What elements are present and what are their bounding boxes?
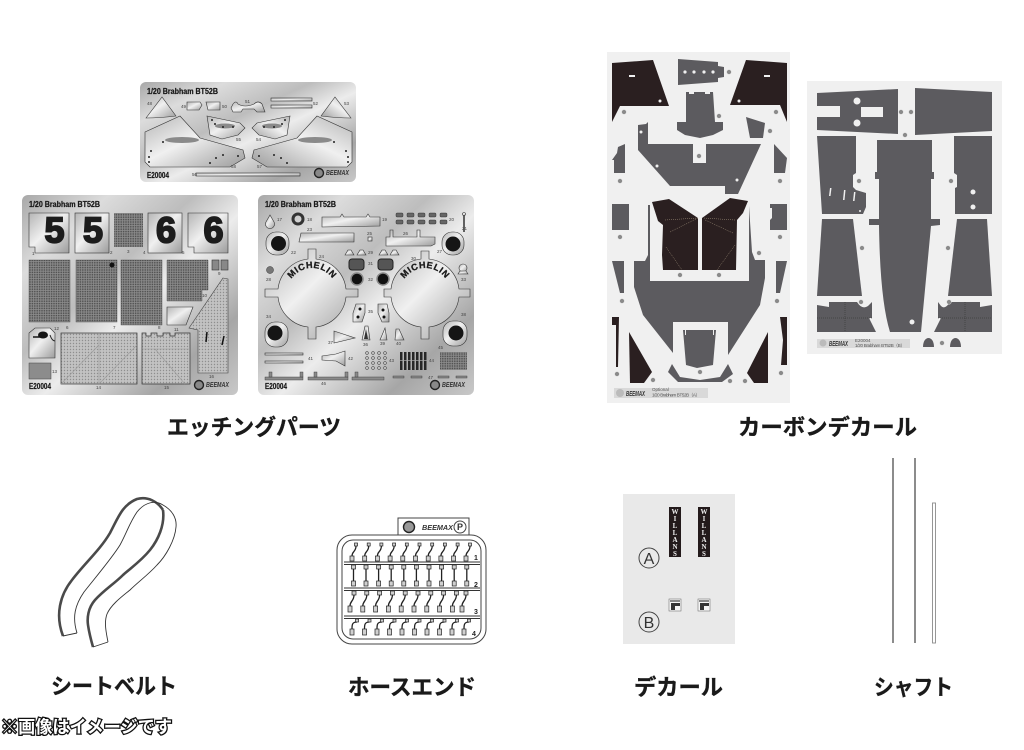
note: image is for illustration: ※画像はイメージです	[1, 717, 172, 737]
lower mesh plates	[29, 333, 190, 384]
panel: carbon decal sheet A	[607, 52, 790, 403]
part numbers: 15	[164, 385, 170, 390]
sheet label strip	[614, 387, 708, 398]
runner numbers: 2	[474, 582, 478, 589]
part numbers: 1	[32, 251, 35, 256]
dot grid 43	[366, 352, 386, 370]
part numbers: 50	[222, 104, 228, 109]
hose row 1	[350, 543, 472, 561]
part numbers: 28	[266, 277, 272, 282]
WILLANS decal right: A	[701, 536, 707, 544]
logo: BEEMAX	[314, 168, 350, 178]
part numbers: 25	[367, 231, 373, 236]
fret title: 1/20 Brabham BT52B	[265, 200, 336, 209]
small top parts	[266, 212, 466, 246]
part numbers: 8	[158, 325, 161, 330]
part numbers: 37	[328, 340, 334, 345]
marker B: B	[644, 615, 654, 632]
panel: carbon decal sheet B	[807, 81, 1002, 354]
part numbers: 56	[192, 172, 198, 177]
heading: shaft: シャフト	[874, 675, 953, 700]
sheet label strip: Optional	[652, 387, 669, 392]
side plate 16	[189, 278, 228, 373]
fret code: E20004	[265, 382, 287, 391]
mesh panels	[29, 213, 228, 325]
wheel discs corner	[265, 232, 467, 347]
part numbers: 36	[363, 342, 369, 347]
part numbers: 23	[307, 227, 313, 232]
sprue tag	[398, 518, 469, 535]
part numbers: 21	[462, 226, 468, 231]
fret title: 1/20 Brabham BT52B	[29, 200, 100, 209]
part numbers: 14	[96, 385, 102, 390]
WILLANS decal left: I	[674, 515, 677, 523]
part numbers: 29	[368, 250, 374, 255]
WILLANS decal right: S	[702, 550, 706, 558]
WILLANS decal left: L	[673, 522, 678, 530]
logo: BEEMAX	[194, 380, 230, 390]
logo: BEEMAX: BEEMAX	[442, 382, 466, 389]
logo: BEEMAX	[430, 380, 466, 390]
illustration: hose ends sprue	[337, 518, 486, 644]
part numbers: 57	[257, 164, 263, 169]
WILLANS decal left: L	[673, 529, 678, 537]
fret code: E20004	[147, 171, 169, 180]
part numbers: 22	[291, 250, 297, 255]
part numbers	[32, 249, 221, 390]
grey carbon decals	[612, 59, 787, 382]
part numbers: 6	[66, 325, 69, 330]
part numbers: 11	[174, 327, 179, 332]
part numbers: 7	[113, 325, 116, 330]
heading: seat belt: シートベルト	[51, 674, 177, 699]
marker A	[639, 548, 659, 568]
dot block 45	[440, 352, 467, 370]
number plates: 5	[44, 210, 65, 250]
part numbers: 18	[307, 217, 313, 222]
WILLANS decal left: W	[672, 508, 678, 516]
sheet label strip: E20004	[855, 338, 871, 343]
heading: decal: デカール	[634, 675, 723, 700]
decal number markers	[615, 70, 783, 383]
stitching lines	[817, 302, 992, 332]
part numbers: 45	[438, 345, 444, 350]
part numbers: 34	[266, 314, 272, 319]
part numbers: 40	[396, 341, 402, 346]
decal number markers	[857, 110, 953, 345]
center small parts 28 to 35	[266, 250, 468, 322]
small parts 49 to 52 and 56	[187, 98, 312, 176]
part numbers: 16	[209, 374, 215, 379]
WILLANS decal left: S	[673, 550, 677, 558]
part numbers: 31	[368, 261, 374, 266]
part numbers: 2	[110, 250, 113, 255]
part numbers: 49	[181, 104, 187, 109]
hose row 3	[348, 591, 468, 612]
hose row 2	[352, 565, 469, 586]
sheet label strip: BEEMAX	[626, 391, 646, 398]
part numbers: 39	[380, 341, 386, 346]
part numbers: 43	[389, 358, 395, 363]
part numbers: 27	[437, 249, 443, 254]
WILLANS decal right: L	[702, 529, 707, 537]
runner numbers: 3	[474, 609, 478, 616]
runners 46 and 47	[265, 372, 467, 380]
part numbers: 46	[321, 381, 327, 386]
sheet label strip: 1/20 Brabham BT52B（B）	[855, 343, 905, 348]
part numbers: 3	[127, 249, 130, 254]
number plates	[29, 210, 228, 253]
number plates: 6	[203, 210, 224, 250]
illustration: seat belts	[59, 498, 176, 647]
part numbers: 12	[54, 326, 60, 331]
runner numbers	[472, 555, 478, 638]
small decal right	[698, 599, 710, 611]
part numbers: 24	[319, 254, 325, 259]
sprue frame	[337, 535, 486, 644]
part numbers: 38	[461, 312, 467, 317]
WILLANS decal left: A	[672, 536, 678, 544]
runner numbers: 4	[472, 631, 476, 638]
fret title: 1/20 Brabham BT52B	[147, 87, 218, 96]
part numbers: 5	[182, 250, 185, 255]
part numbers: 54	[256, 137, 262, 142]
panel: etching fret top	[140, 82, 356, 182]
small decal left	[669, 599, 681, 611]
sheet label strip: 1/20 Brabham BT52B（A）	[652, 392, 700, 398]
lower triangular parts	[265, 326, 404, 366]
part numbers: 35	[368, 309, 374, 314]
part numbers: 47	[428, 375, 434, 380]
disc: Michelin right	[384, 250, 470, 340]
white holes and slashes	[829, 98, 976, 324]
part numbers: 44	[429, 358, 435, 363]
small part grid 20	[396, 213, 447, 224]
part numbers: 53	[344, 101, 350, 106]
hose row 4	[350, 619, 470, 635]
heading: etching parts: エッチングパーツ	[167, 415, 341, 440]
sprue tag: BEEMAX	[422, 525, 454, 532]
number plates: 5	[83, 210, 103, 250]
part numbers: 4	[143, 250, 146, 255]
disc: Michelin left: MICHELIN	[286, 262, 337, 278]
logo: BEEMAX: BEEMAX	[326, 170, 350, 177]
part numbers: 33	[461, 277, 467, 282]
WILLANS decal left: N	[672, 543, 678, 551]
part numbers: 17	[277, 217, 283, 222]
part numbers: 19	[382, 217, 388, 222]
white holes and dashes	[629, 70, 770, 335]
WILLANS decal right: L	[702, 522, 707, 530]
part numbers: 13	[52, 369, 58, 374]
disc: Michelin right: MICHELIN	[400, 262, 450, 278]
part numbers: 55	[236, 137, 242, 142]
WILLANS decal right: W	[700, 508, 708, 516]
part numbers: 20	[449, 217, 455, 222]
part numbers	[147, 99, 350, 177]
black corner decals	[612, 60, 787, 383]
sheet label strip: BEEMAX	[829, 341, 849, 348]
panel: etching fret left with numbers 5 and 6	[22, 195, 238, 395]
logo: BEEMAX: BEEMAX	[206, 382, 230, 389]
part numbers: 58	[231, 164, 237, 169]
fret code: E20004	[29, 382, 51, 391]
sprue tag: P	[457, 522, 463, 532]
left wing parts	[145, 97, 245, 167]
part numbers: 26	[403, 231, 409, 236]
right wing parts	[252, 97, 352, 167]
part numbers: 32	[368, 277, 374, 282]
disc: Michelin left	[264, 248, 358, 340]
illustration: shafts	[892, 458, 936, 643]
grey carbon decals	[817, 88, 992, 347]
part numbers	[266, 217, 468, 386]
dark pin block 44	[400, 352, 427, 370]
part numbers: 10	[202, 293, 208, 298]
runner numbers: 1	[474, 555, 478, 562]
heading: hose ends: ホースエンド	[348, 675, 476, 700]
WILLANS decal left	[669, 507, 681, 558]
number plates: 6	[156, 210, 176, 250]
sheet label strip	[817, 338, 910, 348]
panel: etching fret right with Michelin discs	[258, 195, 474, 395]
heading: carbon decal: カーボンデカール	[738, 415, 917, 440]
part numbers: 42	[348, 356, 354, 361]
part numbers: 30	[411, 256, 417, 261]
part numbers: 41	[308, 356, 314, 361]
part numbers: 52	[313, 101, 319, 106]
part numbers: 9	[218, 271, 221, 276]
panel: decal sheet	[623, 494, 735, 644]
WILLANS decal right: I	[703, 515, 706, 523]
part numbers: 48	[147, 101, 153, 106]
marker B	[639, 612, 659, 632]
marker A: A	[644, 551, 655, 568]
WILLANS decal right: N	[701, 543, 707, 551]
WILLANS decal right	[698, 507, 710, 558]
plate 12	[29, 328, 55, 358]
part numbers: 51	[245, 99, 251, 104]
